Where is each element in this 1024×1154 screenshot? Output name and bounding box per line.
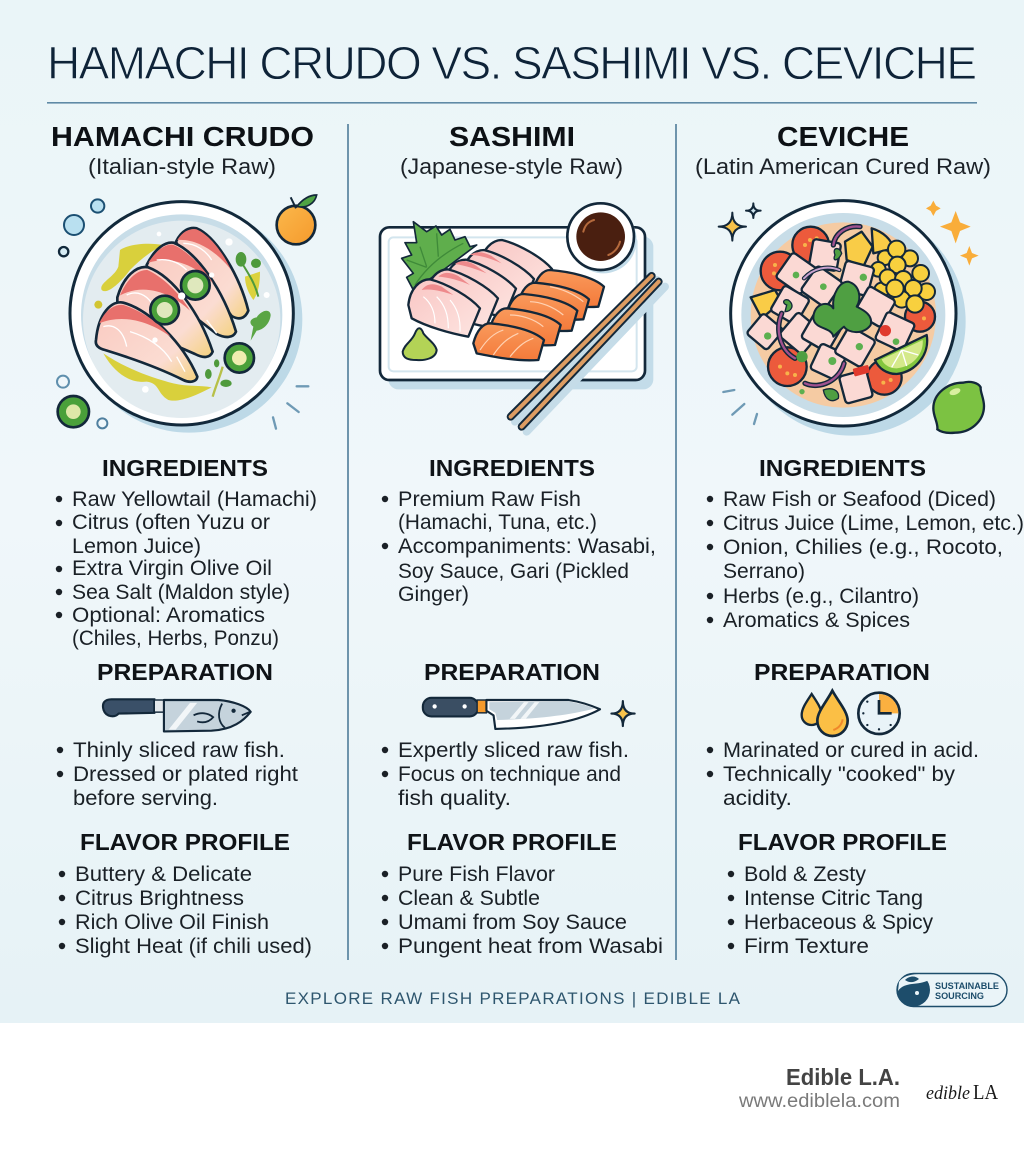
wasabi: [403, 328, 437, 360]
flavor list: Pure Fish Flavor: [398, 863, 555, 886]
heading: ingredients: INGREDIENTS: [429, 455, 595, 481]
slices: [176, 228, 248, 318]
heading: flavor profile: FLAVOR PROFILE: [407, 829, 617, 855]
badge: sustainable sourcing: SUSTAINABLE: [935, 981, 999, 992]
salt: [142, 232, 270, 393]
soy bowl: [570, 207, 637, 273]
ingredients list: Premium Raw Fish: [398, 488, 581, 511]
ingredients list: (Chiles, Herbs, Ponzu): [72, 627, 279, 650]
preparation list: Marinated or cured in acid.: [723, 739, 979, 762]
ingredients list: Raw Yellowtail (Hamachi): [72, 488, 317, 511]
source credit: Edible L.A.: [786, 1064, 900, 1090]
lime wedge: [875, 335, 927, 374]
corn: [871, 241, 935, 313]
flavor list: Buttery & Delicate: [75, 863, 252, 886]
preparation list: before serving.: [73, 787, 218, 810]
heading: flavor profile: FLAVOR PROFILE: [80, 829, 290, 855]
flavor list: [59, 863, 312, 958]
illustration: crudo plate: [57, 195, 317, 433]
heading: ceviche: CEVICHE: [777, 121, 909, 152]
ingredients list: Ginger): [398, 583, 469, 606]
icon: citrus drops and clock: [802, 691, 900, 736]
preparation list: [707, 739, 979, 810]
ingredients list: Herbs (e.g., Cilantro): [723, 585, 919, 608]
flavor list: Firm Texture: [744, 935, 869, 958]
panel: ceviche: [695, 121, 1024, 958]
badge: sustainable sourcing: SOURCING: [935, 991, 984, 1002]
heading: sashimi: SASHIMI: [449, 121, 575, 152]
flavor list: Intense Citric Tang: [744, 887, 923, 910]
chopsticks: [515, 280, 665, 432]
ingredients list: [56, 488, 317, 650]
footer tagline: EXPLORE RAW FISH PREPARATIONS | EDIBLE LA: [285, 989, 741, 1008]
fish cubes: [746, 239, 915, 404]
pink fish slices: [408, 240, 552, 337]
ingredients list: Optional: Aromatics: [72, 604, 265, 627]
ingredients list: Serrano): [723, 560, 805, 583]
logo: edible LA: LA: [973, 1080, 999, 1104]
preparation list: [57, 739, 298, 810]
bubbles: [64, 215, 84, 235]
shiso leaf: [402, 222, 477, 290]
preparation list: Technically "cooked" by: [723, 763, 956, 786]
whole lime: [933, 382, 984, 433]
ingredients list: Raw Fish or Seafood (Diced): [723, 488, 996, 511]
ingredients list: Accompaniments: Wasabi,: [398, 535, 656, 558]
ingredients list: [707, 488, 1024, 632]
heading: hamachi crudo: (Italian-style Raw): [88, 154, 276, 179]
preparation list: acidity.: [723, 787, 792, 810]
panel: sashimi: [380, 121, 665, 958]
logo: edible LA: [926, 1080, 999, 1104]
ingredients list: Onion, Chilies (e.g., Rocoto,: [723, 536, 1003, 559]
ingredients list: Aromatics & Spices: [723, 609, 910, 632]
ingredients list: Soy Sauce, Gari (Pickled: [398, 560, 629, 583]
preparation list: Expertly sliced raw fish.: [398, 739, 629, 762]
flavor list: Bold & Zesty: [744, 863, 866, 886]
sparkles: [719, 213, 746, 241]
ingredients list: Citrus (often Yuzu or: [72, 511, 270, 534]
preparation list: Focus on technique and: [398, 763, 621, 786]
illustration: sashimi plate: [380, 203, 665, 432]
flavor list: Slight Heat (if chili used): [75, 935, 312, 958]
heading: sashimi: (Japanese-style Raw): [400, 154, 623, 179]
flavor list: Pungent heat from Wasabi: [398, 935, 663, 958]
flavor list: [728, 863, 933, 958]
ingredients list: Sea Salt (Maldon style): [72, 581, 290, 604]
logo: edible LA: edible: [926, 1083, 970, 1104]
pineapple: [751, 228, 893, 318]
icon: knife with fish: [103, 699, 251, 731]
preparation list: [382, 739, 629, 810]
oil: [101, 244, 163, 291]
heading: hamachi crudo: HAMACHI CRUDO: [51, 121, 314, 152]
salmon slices: [473, 270, 604, 360]
heading: sashimi: [400, 121, 623, 179]
flavor list: Umami from Soy Sauce: [398, 911, 627, 934]
ingredients list: (Hamachi, Tuna, etc.): [398, 511, 597, 534]
flavor list: Rich Olive Oil Finish: [75, 911, 269, 934]
heading: ingredients: INGREDIENTS: [102, 455, 268, 481]
preparation list: Dressed or plated right: [73, 763, 298, 786]
ingredients list: [382, 488, 656, 606]
ingredients list: Lemon Juice): [72, 535, 201, 558]
preparation list: Thinly sliced raw fish.: [73, 739, 285, 762]
red onion: [779, 226, 860, 385]
preparation list: fish quality.: [398, 787, 511, 810]
heading: preparation: PREPARATION: [97, 659, 273, 685]
source credit: [738, 1064, 900, 1112]
herbs: [240, 260, 258, 297]
ingredients list: Extra Virgin Olive Oil: [72, 557, 272, 580]
tomatoes: [761, 227, 935, 395]
flavor list: [382, 863, 663, 958]
heading: ingredients: INGREDIENTS: [759, 455, 926, 481]
heading: ceviche: (Latin American Cured Raw): [695, 154, 991, 179]
icon: chef knife with sparkle: [423, 698, 635, 729]
source credit: www.ediblela.com: [738, 1091, 900, 1112]
heading: preparation: PREPARATION: [754, 659, 930, 685]
badge: sustainable sourcing: [897, 974, 1007, 1006]
heading: preparation: PREPARATION: [424, 659, 600, 685]
cilantro: [813, 282, 871, 337]
heading: hamachi crudo: [51, 121, 314, 179]
title: HAMACHI CRUDO VS. SASHIMI VS. CEVICHE: [47, 37, 977, 89]
illustration: ceviche bowl: [719, 201, 984, 436]
panel: hamachi crudo: [51, 121, 317, 958]
flavor list: Clean & Subtle: [398, 887, 540, 910]
ingredients list: Citrus Juice (Lime, Lemon, etc.): [723, 512, 1024, 535]
jalapeno slices: [58, 271, 254, 427]
heading: ceviche: [695, 121, 991, 179]
orange: [277, 206, 315, 244]
heading: flavor profile: FLAVOR PROFILE: [738, 829, 947, 855]
flavor list: Herbaceous & Spicy: [744, 911, 933, 934]
red pepper: [880, 325, 891, 336]
flavor list: Citrus Brightness: [75, 887, 244, 910]
